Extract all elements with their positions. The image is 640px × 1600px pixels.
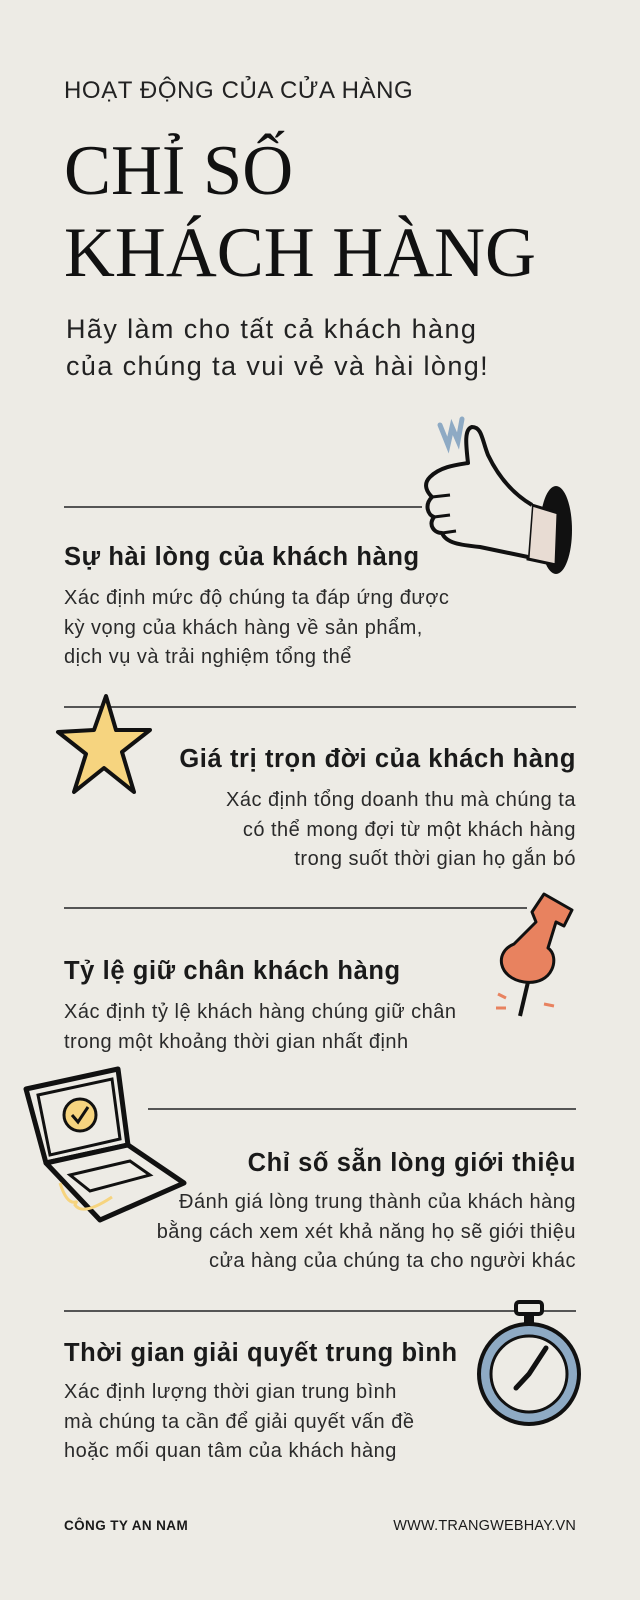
title: CHỈ SỐ (64, 132, 293, 210)
body 3: Xác định tỷ lệ khách hàng chúng giữ chân (64, 1001, 457, 1023)
icon: thumbs up (424, 416, 572, 574)
body 5: mà chúng ta cần để giải quyết vấn đề (64, 1410, 414, 1432)
body 1: Xác định mức độ chúng ta đáp ứng được (64, 587, 449, 609)
body 3: trong một khoảng thời gian nhất định (64, 1030, 409, 1052)
body 1: dịch vụ và trải nghiệm tổng thể (64, 646, 352, 668)
section 2 (179, 745, 576, 870)
footer left: CÔNG TY AN NAM (64, 1518, 188, 1533)
body 4: Đánh giá lòng trung thành của khách hàng (179, 1191, 576, 1213)
section 1 (64, 543, 449, 668)
heading 3: Tỷ lệ giữ chân khách hàng (64, 957, 401, 985)
subtitle: Hãy làm cho tất cả khách hàng (66, 314, 477, 344)
title: KHÁCH HÀNG (64, 214, 536, 292)
heading 2: Giá trị trọn đời của khách hàng (179, 745, 576, 773)
icon: stopwatch (477, 1300, 581, 1426)
icon: star (56, 694, 152, 794)
footer right: WWW.TRANGWEBHAY.VN (393, 1518, 576, 1534)
body 4 (157, 1191, 576, 1272)
icon: push pin (496, 892, 574, 1016)
body 1: kỳ vọng của khách hàng về sản phẩm, (64, 616, 423, 638)
body 4: cửa hàng của chúng ta cho người khác (209, 1250, 576, 1272)
body 2: có thể mong đợi từ một khách hàng (243, 818, 576, 840)
section 3 (64, 957, 457, 1052)
body 2: trong suốt thời gian họ gắn bó (294, 848, 576, 870)
title (64, 130, 536, 292)
body 5 (64, 1381, 414, 1462)
body 5: Xác định lượng thời gian trung bình (64, 1381, 397, 1403)
section 4 (157, 1148, 576, 1272)
section 5 (64, 1339, 458, 1462)
heading 1: Sự hài lòng của khách hàng (64, 543, 420, 571)
body 3 (64, 1001, 457, 1052)
body 1 (64, 587, 449, 668)
subtitle: của chúng ta vui vẻ và hài lòng! (66, 351, 489, 381)
icon: laptop (24, 1066, 186, 1222)
heading 4: Chỉ số sẵn lòng giới thiệu (248, 1149, 576, 1177)
subtitle (66, 314, 489, 381)
body 2: Xác định tổng doanh thu mà chúng ta (226, 789, 576, 811)
body 5: hoặc mối quan tâm của khách hàng (64, 1440, 397, 1462)
body 2 (226, 789, 576, 870)
body 4: bằng cách xem xét khả năng họ sẽ giới thiệu (157, 1220, 576, 1242)
heading 5: Thời gian giải quyết trung bình (64, 1339, 458, 1367)
kicker: HOẠT ĐỘNG CỦA CỬA HÀNG (64, 77, 413, 104)
